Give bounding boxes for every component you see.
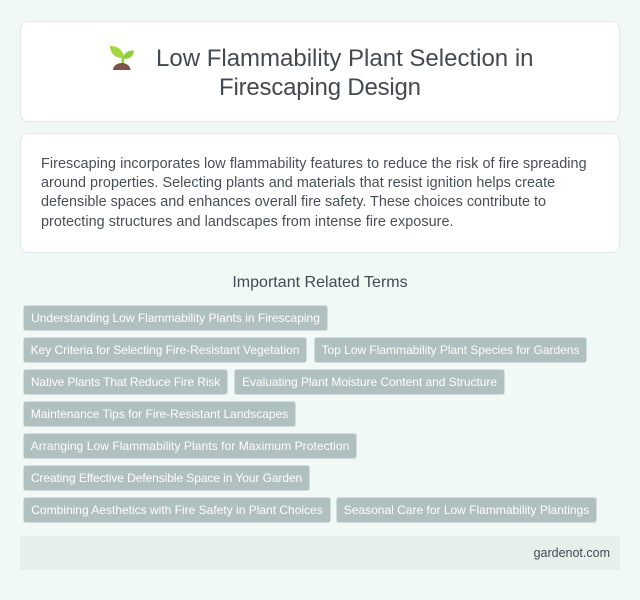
heading: important related terms: Important Related Terms [232, 274, 408, 291]
panel: description card [20, 133, 620, 253]
title: Low Flammability Plant Selection in [156, 45, 534, 72]
tag group: related terms [23, 305, 597, 523]
tag: Key Criteria for Selecting Fire-Resistant Vegetation [31, 343, 299, 357]
description text: protecting structures and landscapes from intense fire exposure. [41, 214, 454, 230]
tag: Creating Effective Defensible Space in Your Garden [31, 471, 302, 485]
tag [336, 497, 597, 523]
tag [23, 369, 228, 395]
description text [41, 156, 587, 230]
icon: seedling [110, 46, 134, 70]
tag [23, 337, 307, 363]
tag [23, 497, 331, 523]
tag [23, 305, 328, 331]
tag: Native Plants That Reduce Fire Risk [31, 375, 220, 389]
tag: Evaluating Plant Moisture Content and Structure [242, 375, 497, 389]
tag [314, 337, 587, 363]
tag: Seasonal Care for Low Flammability Plantings [344, 503, 589, 517]
description text: Firescaping incorporates low flammability features to reduce the risk of fire spreading [41, 156, 587, 172]
description text: around properties. Selecting plants and materials that resist ignition helps create [41, 175, 555, 191]
tag: Maintenance Tips for Fire-Resistant Landscapes [31, 407, 288, 421]
tag [23, 401, 296, 427]
tag: Top Low Flammability Plant Species for Gardens [322, 343, 579, 357]
title: Firescaping Design [219, 74, 421, 101]
tag [234, 369, 505, 395]
footer source text: gardenot.com [534, 546, 610, 560]
tag [23, 433, 357, 459]
title [156, 45, 534, 101]
panel: header card [20, 21, 620, 122]
tag: Combining Aesthetics with Fire Safety in Plant Choices [31, 503, 323, 517]
footer bar [20, 536, 620, 570]
description text: defensible spaces and enhances overall fire safety. These choices contribute to [41, 194, 546, 210]
tag [23, 465, 310, 491]
tag: Arranging Low Flammability Plants for Maximum Protection [31, 439, 349, 453]
tag: Understanding Low Flammability Plants in Firescaping [31, 311, 320, 325]
